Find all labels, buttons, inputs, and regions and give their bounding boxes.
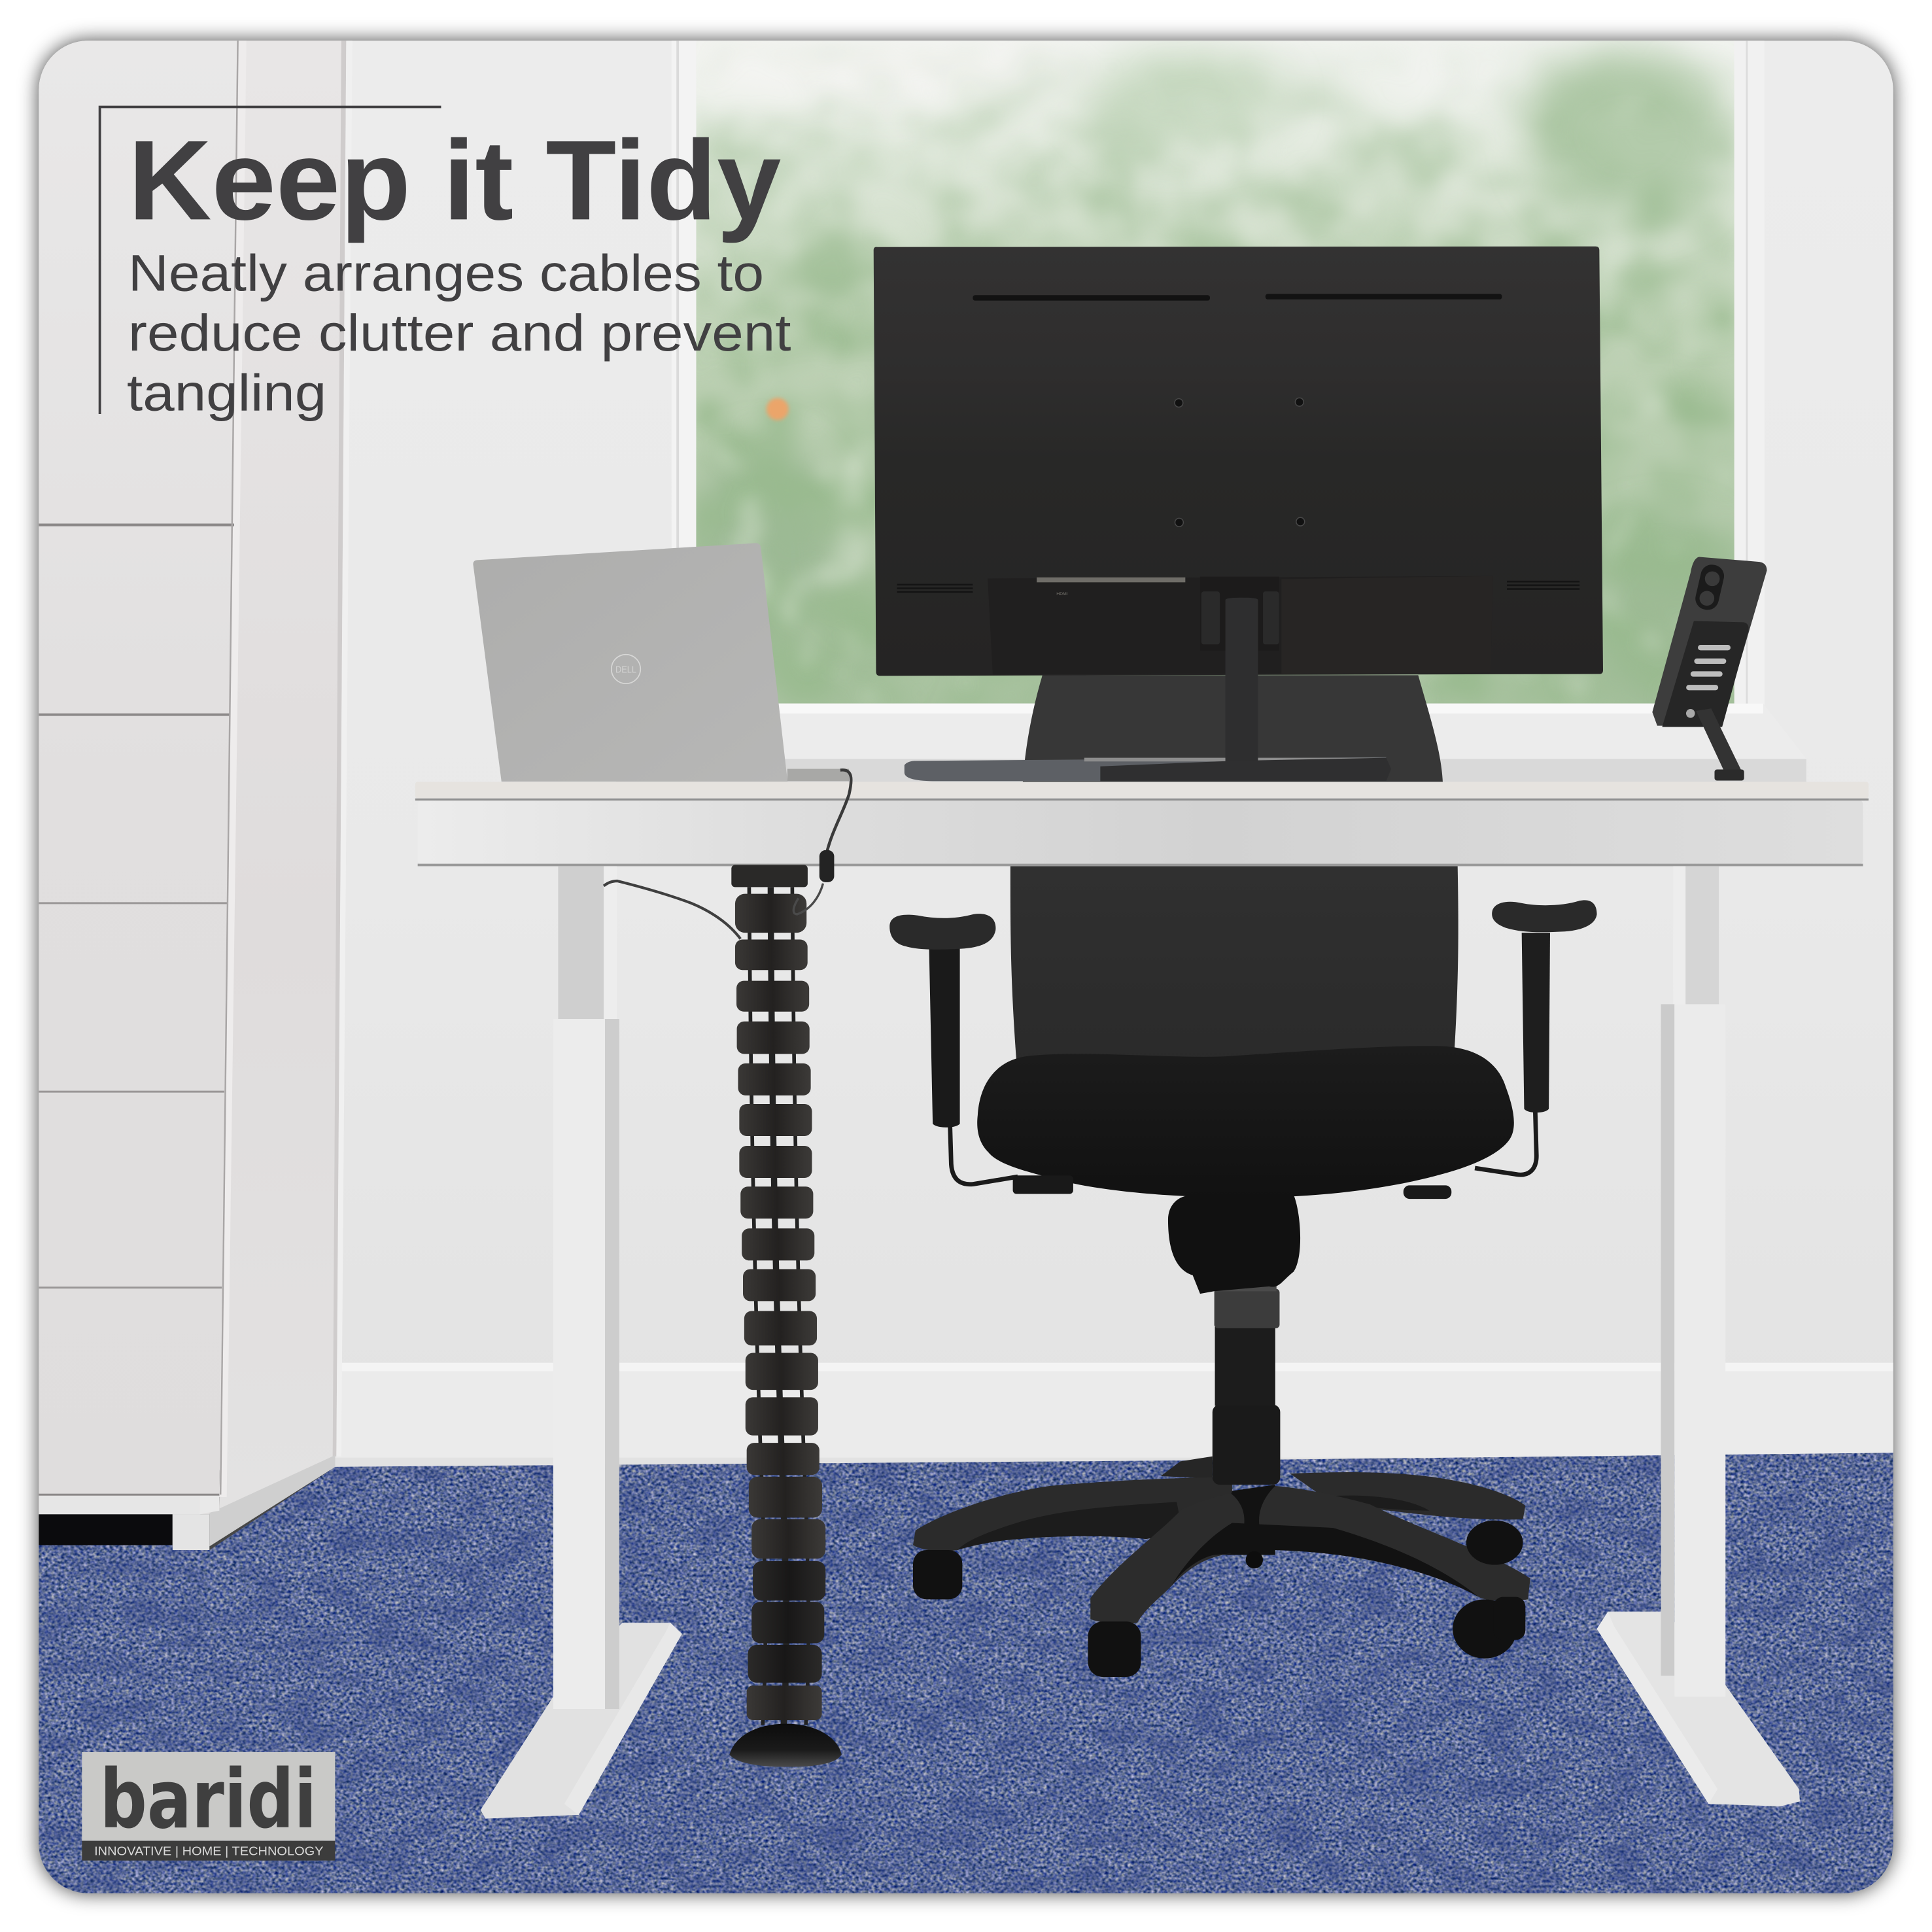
spine segments	[735, 894, 825, 1720]
white cabinet with drawers	[38, 41, 353, 1550]
spine mount	[731, 865, 808, 887]
heading bracket	[100, 107, 441, 414]
subtitle text: Neatly arranges cables to	[128, 244, 764, 302]
logo wordmark: baridi	[100, 1753, 317, 1847]
floor carpet	[38, 1448, 1899, 1897]
right foot	[1597, 1612, 1800, 1806]
cable to leg	[604, 881, 740, 939]
chair tilt mechanism	[1168, 1195, 1300, 1294]
desk top	[415, 782, 1869, 799]
seat under bracket and knob	[1013, 1175, 1451, 1199]
keyboard	[905, 757, 1386, 781]
phone camera	[1693, 562, 1726, 612]
side speaker grilles	[897, 581, 1579, 592]
rear recess	[988, 576, 1493, 674]
brand logo	[82, 1752, 335, 1861]
monitor stand	[1100, 598, 1391, 781]
port labels: HDMI	[1056, 592, 1068, 596]
title: Keep it Tidy	[128, 116, 781, 243]
window frame	[672, 41, 1765, 731]
left arm pad	[889, 914, 995, 950]
cable spine	[729, 865, 842, 1767]
subtitle text: tangling	[127, 363, 326, 421]
right arm post	[1522, 933, 1550, 1113]
right upper leg	[1673, 866, 1719, 1005]
chair casters	[913, 1521, 1525, 1677]
spine connectors	[749, 887, 808, 1725]
right arm pad	[1492, 900, 1597, 932]
chair star base	[913, 1457, 1530, 1624]
cables	[604, 770, 851, 939]
VESA screws	[1175, 398, 1305, 526]
chair upper back	[1023, 675, 1443, 784]
vent slots	[973, 294, 1502, 301]
left lower leg	[553, 1019, 619, 1709]
chair seat cushion	[977, 1046, 1514, 1198]
baseboard	[335, 1363, 1900, 1458]
subtitle text	[127, 244, 791, 421]
monitor rear	[874, 247, 1603, 676]
cable from laptop to spine	[827, 770, 851, 853]
logo tagline: INNOVATIVE | HOME | TECHNOLOGY	[94, 1844, 324, 1857]
chair gas column	[1213, 1281, 1280, 1485]
wallet slots	[1686, 645, 1731, 690]
chair lower back	[1010, 866, 1458, 1078]
ferrite bead	[819, 850, 834, 882]
Dell logo	[612, 655, 640, 683]
left foot	[481, 1623, 682, 1819]
foliage mottling	[696, 41, 1735, 704]
Dell logo: DELL	[615, 664, 636, 676]
right arm bracket	[1475, 1111, 1536, 1175]
right lower leg	[1661, 1004, 1725, 1697]
spine floor dome	[729, 1724, 842, 1767]
monitor stand mount	[1200, 577, 1279, 651]
phone on stand	[1652, 557, 1767, 780]
stand arm	[1696, 708, 1742, 776]
desk	[415, 782, 1869, 1819]
laptop	[473, 543, 849, 782]
desk apron	[418, 800, 1863, 865]
left upper leg	[558, 866, 617, 1020]
window sill	[616, 704, 1806, 782]
office chair	[889, 675, 1597, 1677]
window glass with blurred foliage	[678, 31, 1750, 715]
card wallet stand	[1662, 621, 1749, 727]
wall	[38, 41, 1899, 1470]
left arm post	[929, 946, 960, 1128]
port strip	[1037, 578, 1185, 582]
left arm bracket	[950, 1124, 1018, 1184]
subtitle text: reduce clutter and prevent	[128, 303, 791, 362]
